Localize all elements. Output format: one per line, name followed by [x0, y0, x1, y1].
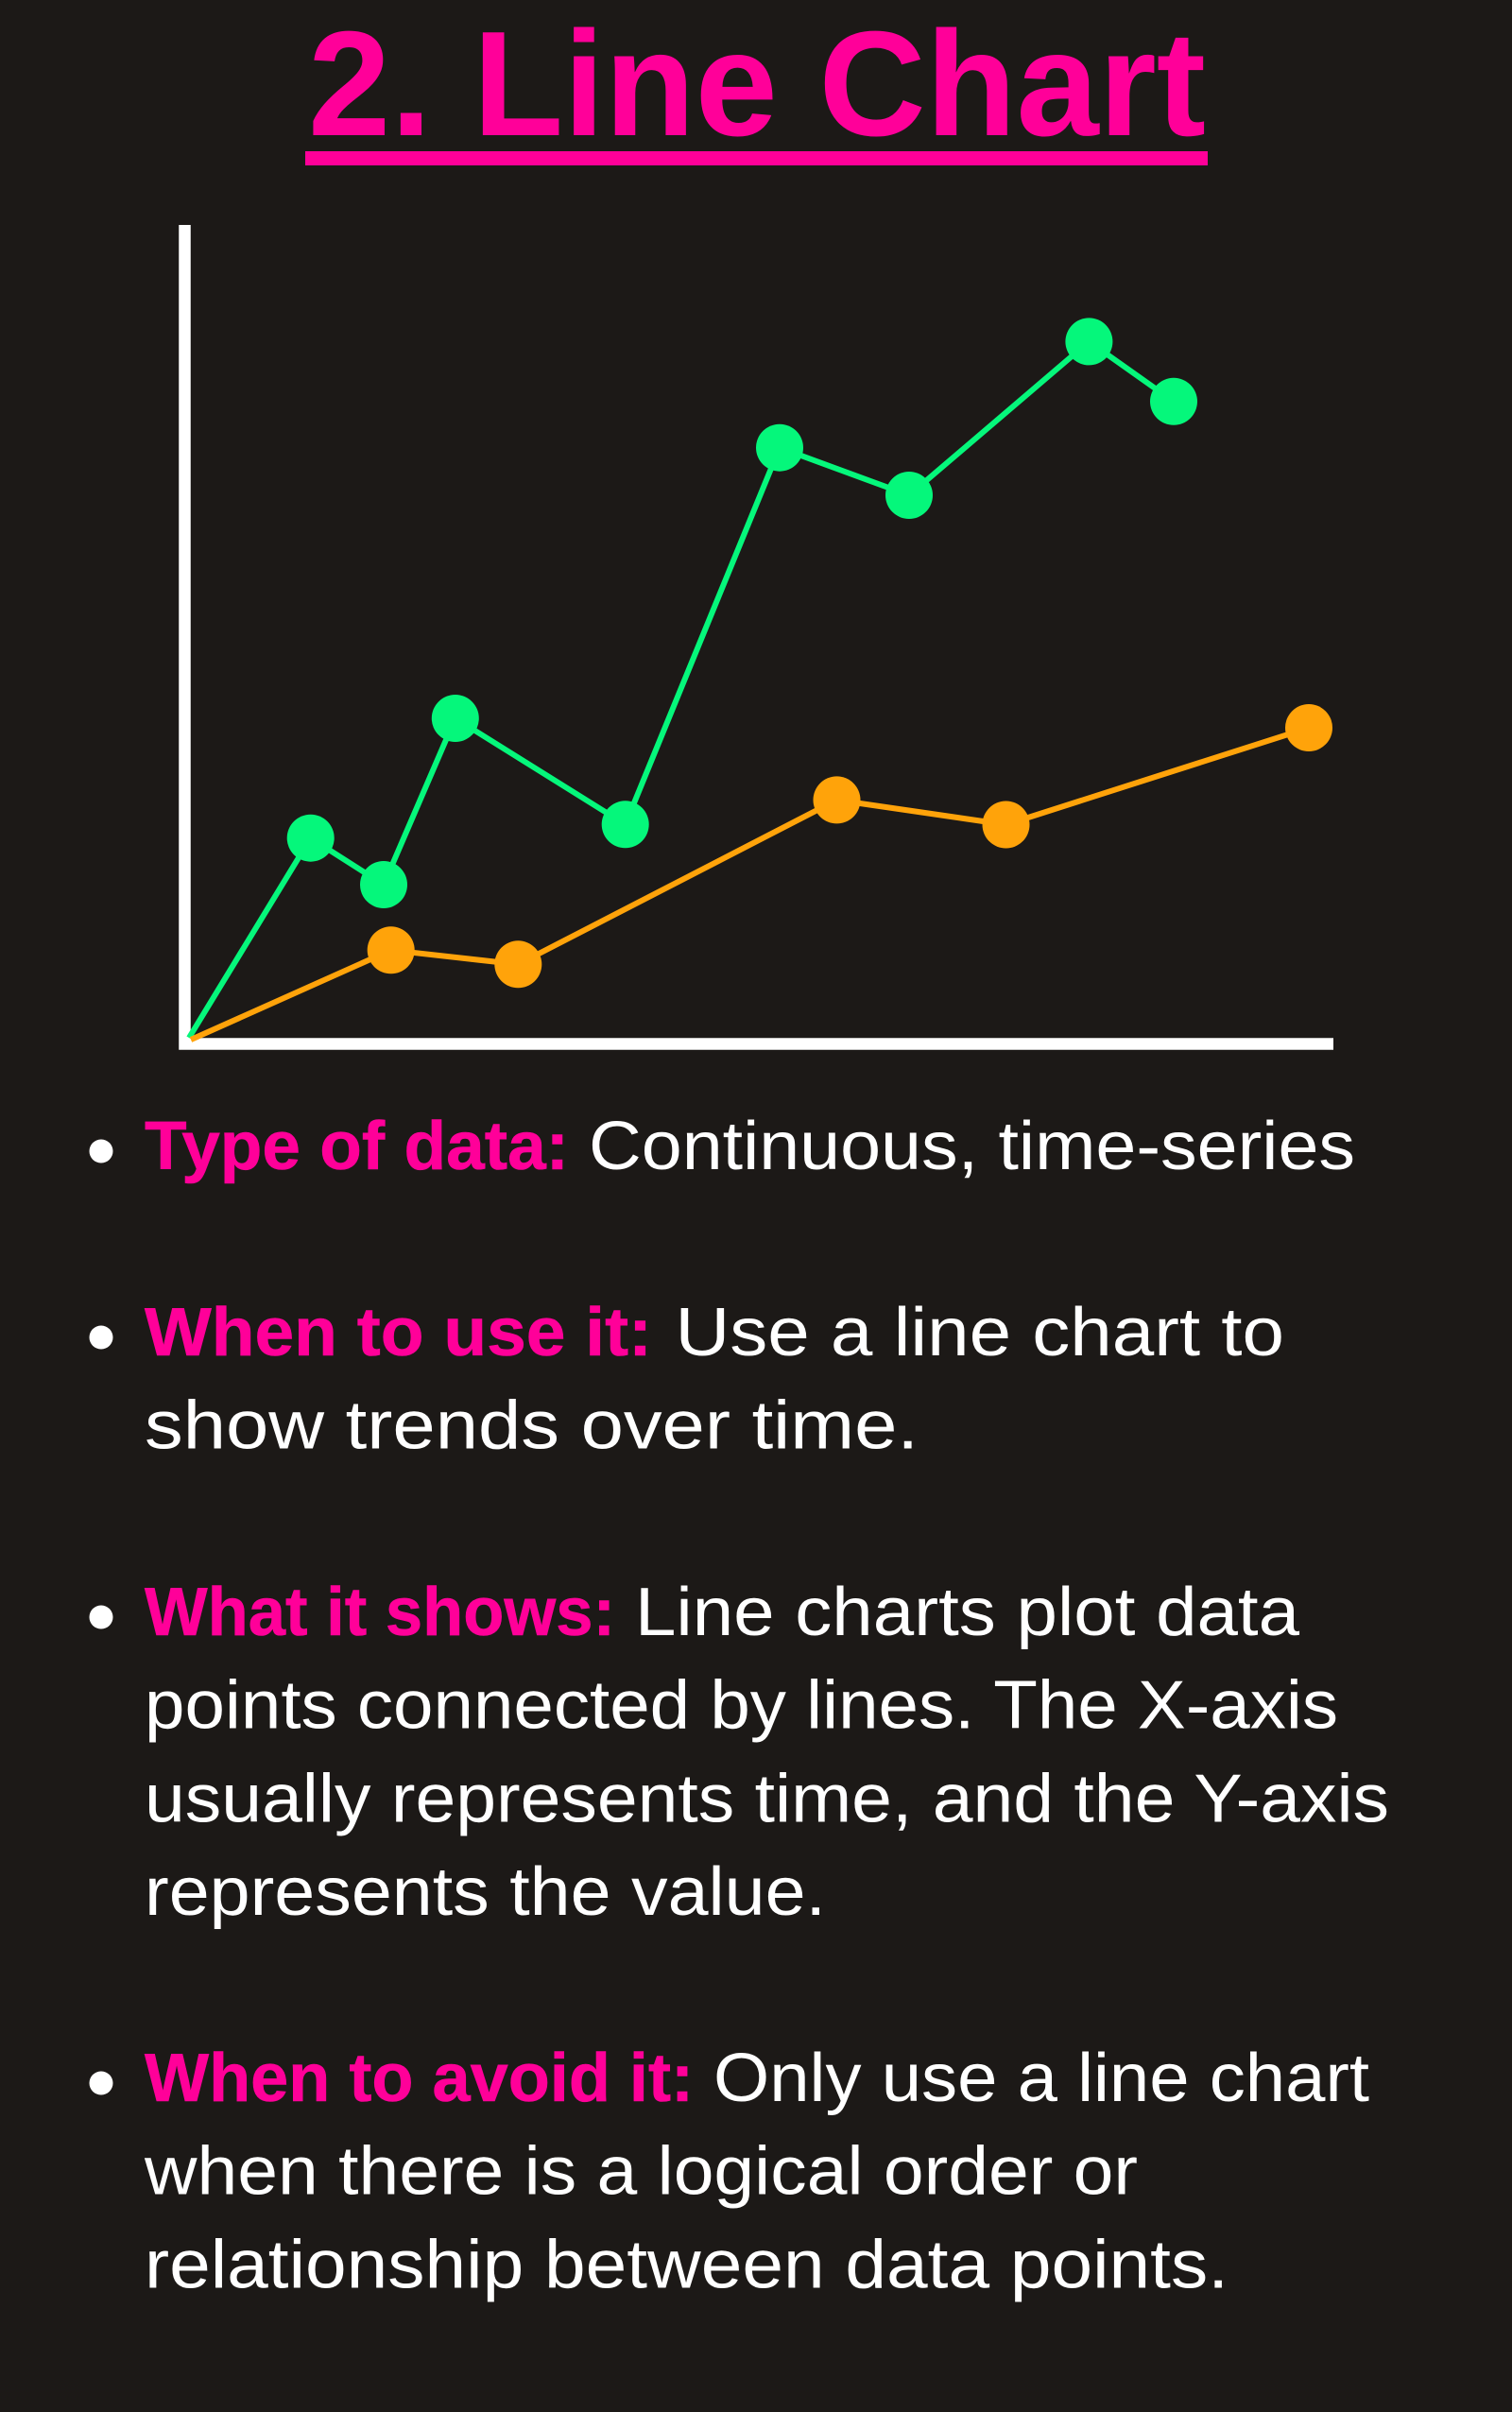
- green data series: [189, 318, 1197, 1038]
- bullet: when to avoid it: Only use a line chart: [713, 2041, 1369, 2116]
- bullet: what it shows: represents the value.: [145, 1854, 826, 1930]
- bullet: what it shows: usually represents time, and the Y-axis: [145, 1761, 1389, 1836]
- bullet: when to avoid it: When to avoid it:: [145, 2041, 694, 2116]
- bullet: when to avoid it: when there is a logical order or: [144, 2134, 1138, 2210]
- bullet: what it shows: [89, 1575, 1389, 1930]
- title: 2. Line Chart: [308, 1, 1206, 167]
- orange data series: [191, 704, 1332, 1040]
- bullet: when to use it: [89, 1295, 1284, 1463]
- line chart: [185, 225, 1333, 1043]
- bullet: type of data: Continuous, time-series: [589, 1109, 1355, 1184]
- bullet: when to use it: show trends over time.: [145, 1387, 919, 1463]
- bullet: what it shows: What it shows:: [145, 1575, 615, 1650]
- bullet: when to use it: Use a line chart to: [675, 1295, 1284, 1370]
- bullet: what it shows: Line charts plot data: [635, 1575, 1300, 1650]
- bullet: when to use it: When to use it:: [145, 1295, 652, 1370]
- chart axes: [185, 225, 1333, 1043]
- bullet: what it shows: points connected by lines. The X-axis: [145, 1668, 1338, 1744]
- bullet: when to avoid it: relationship between data points.: [145, 2227, 1228, 2302]
- bullet: when to avoid it: [89, 2041, 1369, 2302]
- bullet: type of data: Type of data:: [145, 1109, 569, 1184]
- bullet: type of data: [89, 1109, 1355, 1184]
